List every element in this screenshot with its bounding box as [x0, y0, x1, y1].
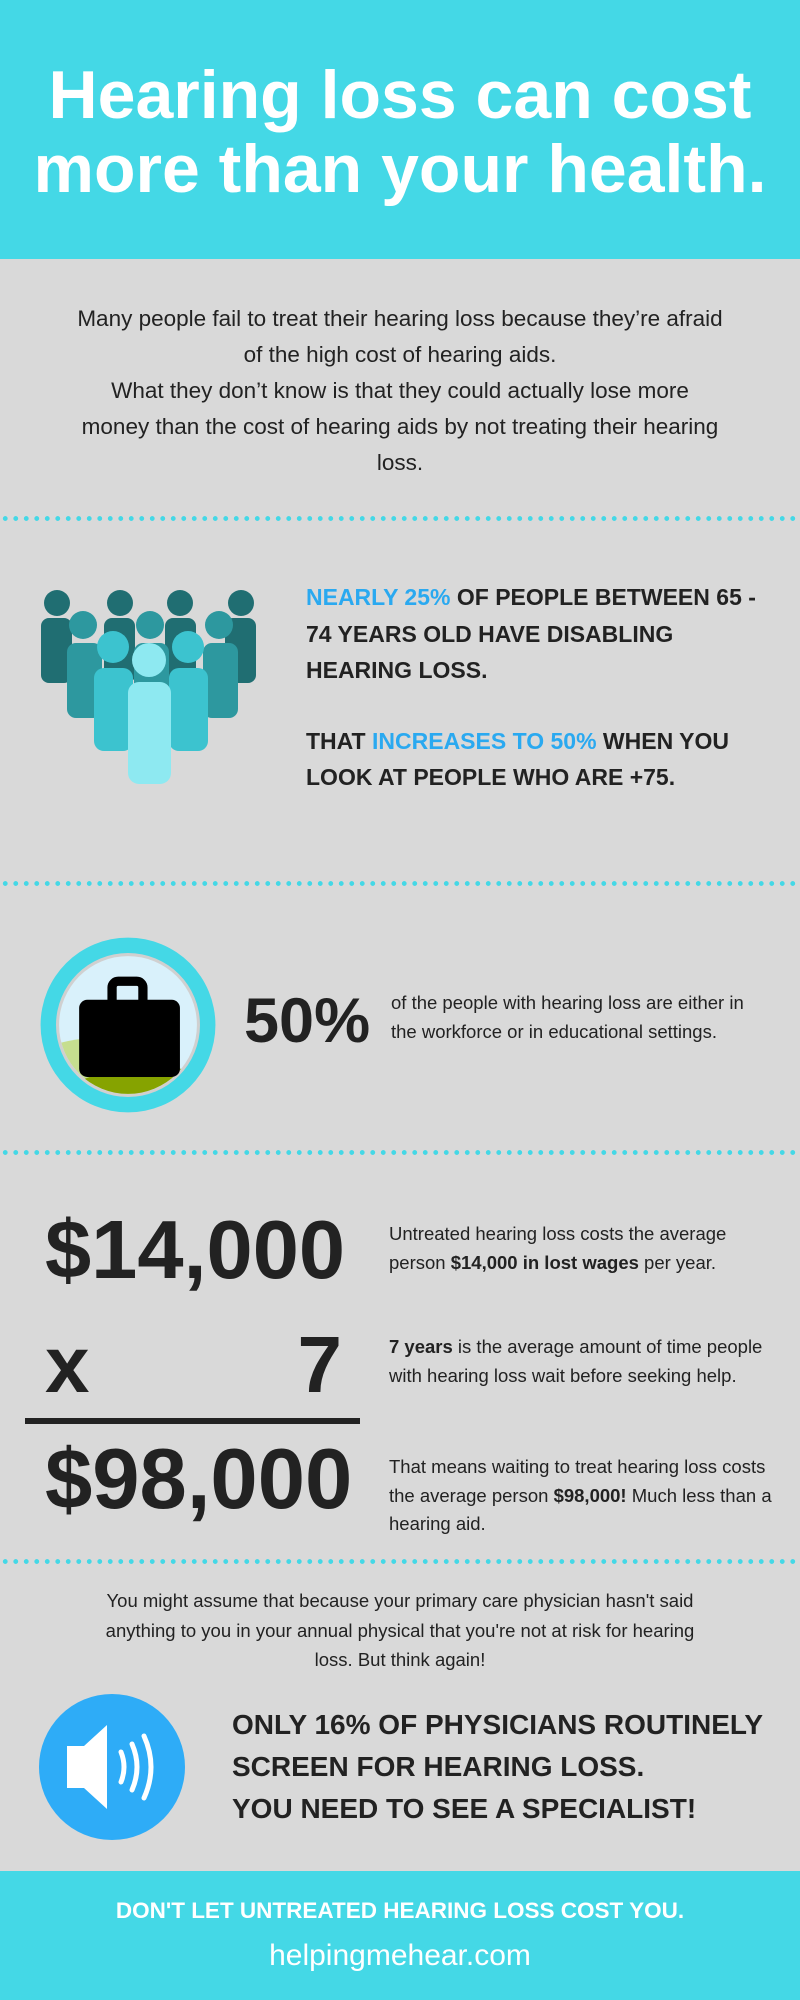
$98,000: $98,000: [45, 1432, 352, 1527]
calculation: lost wages: the average person $98,000! Much less than a: [389, 1484, 772, 1506]
stat: age groups: THAT INCREASES TO 50% WHEN YOU: [306, 728, 729, 754]
stat: age groups: 74 YEARS OLD HAVE DISABLING: [306, 621, 673, 647]
stat: age groups: LOOK AT PEOPLE WHO ARE +75.: [306, 764, 675, 790]
intro text: money than the cost of hearing aids by not treating their hearing: [82, 414, 718, 439]
footer slogan: DON'T LET UNTREATED HEARING LOSS COST YOU.: [116, 1898, 684, 1923]
explanation texts: [389, 1223, 726, 1273]
stat: age groups: NEARLY 25% OF PEOPLE BETWEEN 65 -: [306, 584, 756, 610]
stat: 50% workforce: 50%: [244, 986, 370, 1056]
callout: physicians: [232, 1709, 763, 1824]
icon: speaker: [39, 1694, 185, 1840]
$14,000: $14,000: [45, 1203, 345, 1296]
physician paragraph: loss. But think again!: [315, 1649, 485, 1670]
intro text: loss.: [377, 450, 423, 475]
physician paragraph: anything to you in your annual physical that you're not at risk for hearing: [106, 1620, 694, 1640]
x 7: x: [45, 1320, 90, 1409]
header: [0, 0, 800, 259]
calculation: lost wages: That means waiting to treat hearing loss costs: [389, 1456, 765, 1477]
stat: age groups: HEARING LOSS.: [306, 657, 487, 683]
text: of the people with hearing loss are either in: [391, 992, 744, 1013]
explanation texts: person $14,000 in lost wages per year.: [389, 1252, 716, 1273]
intro text: [77, 306, 723, 475]
title: Hearing loss can cost: [49, 57, 751, 133]
title: more than your health.: [34, 131, 766, 207]
stat: age groups: [306, 584, 756, 790]
intro text: What they don’t know is that they could actually lose more: [111, 378, 689, 403]
footer url: helpingmehear.com: [269, 1939, 531, 1972]
intro text: Many people fail to treat their hearing loss because they’re afraid: [77, 306, 723, 331]
calculation: lost wages: [25, 1203, 772, 1534]
physician paragraph: [106, 1590, 694, 1670]
calculation: lost wages: 7 years is the average amount of time people: [389, 1336, 762, 1357]
calculation: lost wages: with hearing loss wait before seeking help.: [389, 1365, 737, 1386]
callout: physicians: ONLY 16% OF PHYSICIANS ROUTINELY: [232, 1709, 763, 1740]
icon: group of people: [41, 590, 256, 784]
callout: physicians: YOU NEED TO SEE A SPECIALIST!: [232, 1793, 696, 1824]
footer: [0, 1871, 800, 2000]
x 7: [45, 1320, 342, 1409]
icon: briefcase circle: [40, 938, 216, 1112]
callout: physicians: SCREEN FOR HEARING LOSS.: [232, 1751, 644, 1782]
title: [34, 57, 766, 207]
text: the workforce or in educational settings.: [391, 1021, 717, 1042]
explanation texts: Untreated hearing loss costs the average: [389, 1223, 726, 1244]
physician paragraph: You might assume that because your primary care physician hasn't said: [107, 1590, 693, 1611]
x 7: 7: [298, 1320, 342, 1409]
calculation: lost wages: hearing aid.: [389, 1513, 486, 1534]
divider line: [25, 1418, 360, 1424]
intro text: of the high cost of hearing aids.: [244, 342, 556, 367]
